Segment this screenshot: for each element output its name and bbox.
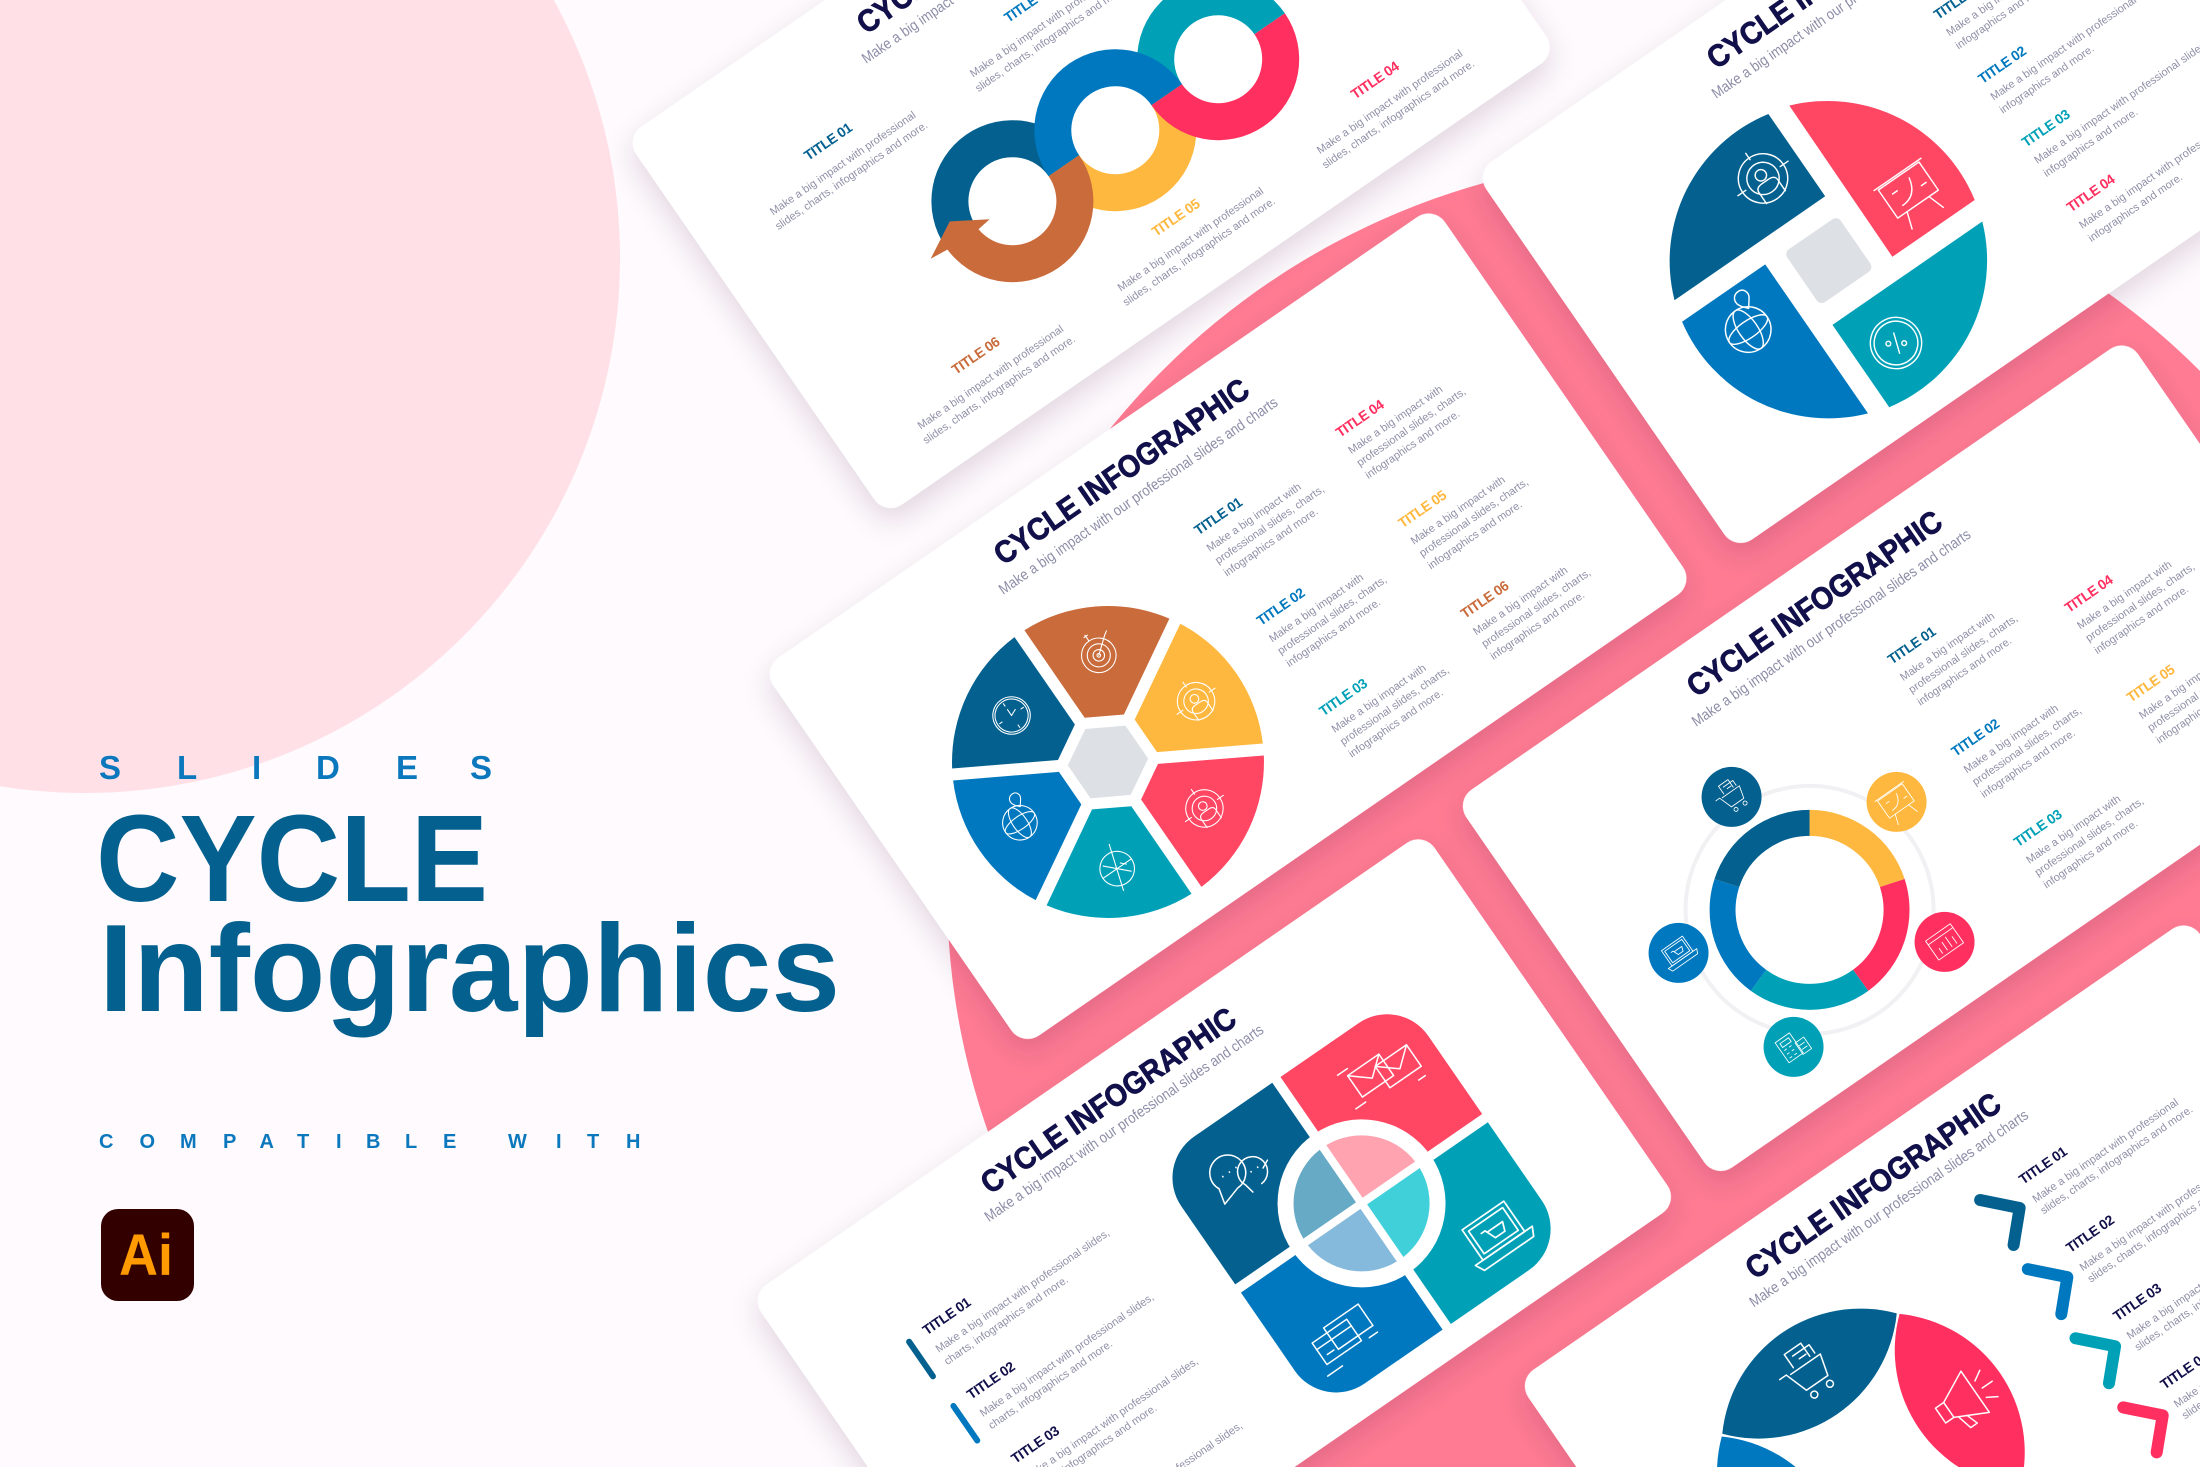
text: title 03	[2011, 763, 2155, 891]
text: title 02: Make a big impact with	[1267, 572, 1366, 645]
text: title 02: Make a big impact with	[1962, 703, 2061, 776]
panel: slide with four part pie	[1475, 0, 2200, 551]
text: title 01: professional slides, charts,	[1213, 483, 1327, 567]
slide card	[762, 206, 1694, 1047]
text: title 04	[2062, 529, 2200, 657]
slide heading: Make a big impact with our professional slides and charts	[982, 1021, 1267, 1226]
text: title 01 with bar: Make a big impact with professional slides,	[934, 1227, 1112, 1355]
panel: slide with hexagon pie	[762, 206, 1694, 1047]
slide heading: CYCLE INFOGRAPHIC	[1680, 503, 1949, 704]
label: COMPATIBLE WITH: COMPATIBLE WITH	[99, 1131, 640, 1153]
rounded square quadrant chart	[1153, 995, 1570, 1412]
text: title 01	[748, 83, 930, 233]
text: title 01	[1191, 451, 1335, 579]
text: title 06: TITLE 06	[949, 333, 1003, 377]
icon: Adobe Illustrator badge	[101, 1209, 194, 1301]
text: title 03: Make a big impact with	[1330, 662, 1429, 736]
text: title 03: TITLE 03	[2011, 806, 2065, 850]
panel: slide with rounded square cycle	[750, 832, 1679, 1467]
four part pie chart	[1608, 40, 2049, 481]
chevrons with titles	[1980, 1071, 2200, 1454]
label: SLIDES: SLIDES	[99, 749, 492, 786]
slide heading: Make a big impact with our professional slides and charts	[1746, 1107, 2032, 1311]
text: title 04: infographics and more.	[1363, 408, 1462, 482]
text: title 04: professional slides, charts,	[2084, 561, 2197, 644]
text: title 01: infographics and more.	[1222, 506, 1321, 579]
chevrons with titles: TITLE 02	[2063, 1211, 2117, 1256]
slide card	[1517, 918, 2200, 1467]
chevrons with titles: Make a big impact with professional	[2031, 1097, 2181, 1205]
slide heading: Make a big impact with our professional slides and charts	[996, 394, 1281, 598]
slide card	[1475, 0, 2200, 551]
text: title 05: TITLE 05	[1149, 195, 1203, 239]
slide card	[750, 832, 1679, 1467]
heading: CYCLE Infographics: Infographics	[99, 900, 840, 1038]
text: title 06: Make a big impact with	[1471, 565, 1570, 638]
text: title 06: infographics and more.	[1488, 589, 1587, 663]
text: title 02	[1254, 542, 1398, 670]
text: title 04: Make a big impact with	[2075, 559, 2174, 632]
text: title 06: TITLE 06	[1458, 577, 1512, 621]
text: title 03: professional slides, charts,	[1338, 664, 1452, 748]
text: title 02	[1948, 673, 2092, 801]
text: title 03: TITLE 03	[2019, 106, 2073, 150]
text: title 02: infographics and more.	[1284, 596, 1383, 670]
decorative pale pink circle	[0, 0, 620, 793]
text: title 04: TITLE 04	[1348, 58, 1402, 102]
text: title 05: TITLE 05	[2123, 661, 2178, 705]
text: title 02: infographics and more.	[1979, 727, 2078, 801]
text: title 04	[1333, 354, 1477, 482]
slide card	[1455, 338, 2200, 1179]
text: title 04: professional slides, charts,	[1355, 386, 1468, 469]
chevrons with titles: TITLE 03	[2110, 1280, 2164, 1324]
text: title 03: infographics and more.	[2041, 106, 2140, 180]
text: title 02: professional slides, charts,	[1970, 705, 2084, 788]
text: title 01 with bar: TITLE 01	[919, 1294, 974, 1338]
leaf petal cycle chart	[1652, 1244, 2089, 1467]
text: title 02: TITLE 02	[1948, 715, 2003, 759]
text: title 02 with bar: TITLE 02	[964, 1358, 1018, 1402]
text: title 05: Make a big impact with professional	[1116, 185, 1266, 294]
text: title 02: professional slides, charts,	[1276, 574, 1389, 657]
text: title 03: infographics and more.	[1347, 687, 1446, 760]
text: title 03	[1316, 632, 1460, 760]
text: title 02: TITLE 02	[1975, 42, 2029, 87]
text: title 06	[1458, 535, 1602, 663]
text: title 04: slides, charts, infographics and more.	[1320, 58, 1477, 171]
text: title 01: infographics and more.	[1915, 635, 2014, 708]
text: title 03: Make a big impact with	[2024, 793, 2123, 866]
text: title 02 with bar	[946, 1271, 1165, 1445]
text: title 04	[1295, 22, 1477, 171]
text: title 05	[1395, 444, 1539, 572]
text: title 04: TITLE 04	[2062, 571, 2116, 616]
text: title 01: TITLE 01	[1885, 623, 1939, 667]
text: title 01: Make a big impact with	[1205, 481, 1304, 555]
six segment pie chart	[882, 532, 1334, 992]
text: title 05: infographics and more.	[1426, 499, 1525, 572]
chevrons with titles: slides, charts, infographics and more.	[2038, 1104, 2195, 1217]
text: title 03: TITLE 03	[1316, 675, 1370, 719]
text: title 01: slides, charts, infographics and more.	[773, 119, 930, 233]
panel: slide with linked rings	[625, 0, 1557, 516]
slide heading: CYCLE INFOGRAPHIC	[1739, 1086, 2007, 1286]
text: title 04: infographics and more.	[2092, 583, 2191, 657]
linked ring chart	[884, 0, 1331, 325]
panel: slide with donut and satellites	[1455, 338, 2200, 1231]
text: title 02 with bar: Make a big impact with professional slides,	[978, 1291, 1156, 1420]
large pink circle behind slides	[947, 156, 2200, 1467]
text: title 05: slides, charts, infographics and more.	[1121, 195, 1278, 309]
text: title 06: slides, charts, infographics and more.	[921, 333, 1078, 447]
text: title 01: TITLE 01	[1191, 494, 1245, 538]
slide heading: CYCLE INFOGRAPHIC	[987, 371, 1256, 572]
text: title 01: Make a big impact with	[1898, 610, 1997, 684]
text: title 01: TITLE 01	[801, 119, 855, 163]
text: title 03: infographics and more.	[2041, 818, 2140, 891]
text: title 06: professional slides, charts,	[1480, 567, 1593, 650]
text: title 01 with bar: charts, infographics and more.	[942, 1274, 1071, 1368]
text: title 05: TITLE 05	[1395, 486, 1449, 531]
text: title 05: Make a big impact with	[1409, 474, 1508, 547]
text: title 01: Make a big impact with professional	[768, 109, 918, 218]
text: title 02 with bar: charts, infographics and more.	[986, 1338, 1115, 1432]
text: title 03 with bar: TITLE 03	[1008, 1422, 1062, 1467]
text: title 05: professional slides, charts,	[1417, 476, 1531, 560]
slide card	[625, 0, 1557, 516]
text: title 04: TITLE 04	[1333, 396, 1387, 440]
text: title 04 with bar	[1035, 1399, 1254, 1467]
text: title 04: TITLE 04	[2064, 171, 2118, 215]
text: title 06: Make a big impact with professional	[916, 323, 1066, 432]
panel: slide with leaf cycle	[1517, 918, 2200, 1467]
text: title 06	[896, 297, 1078, 447]
text: title 01 with bar	[902, 1207, 1121, 1380]
heading: CYCLE Infographics: CYCLE	[96, 791, 488, 928]
text: title 04: Make a big impact with	[1346, 383, 1445, 457]
text: title 02: TITLE 02	[1254, 584, 1308, 629]
text: title 03 with bar	[991, 1335, 1210, 1467]
donut chart with icon satellites	[1649, 767, 1975, 1077]
text: title 04: Make a big impact with professional	[1315, 48, 1465, 157]
text: title 05	[2123, 619, 2200, 747]
heading: CYCLE Infographics	[96, 791, 840, 1038]
slide heading: CYCLE INFOGRAPHIC	[974, 1000, 1243, 1201]
slide heading: Make a big impact with our professional slides and charts	[1689, 526, 1974, 730]
icon: Adobe Illustrator badge: Ai	[119, 1223, 173, 1288]
text: title 04: infographics and more.	[2086, 171, 2185, 245]
text: title 01: professional slides, charts,	[1907, 613, 2020, 696]
text: title 03: professional slides, charts,	[2033, 795, 2146, 879]
text: title 01	[1931, 0, 2132, 52]
text: title 05	[1096, 159, 1278, 309]
text: title 01	[1885, 580, 2029, 708]
text: title 02: infographics and more.	[1998, 43, 2097, 116]
chevrons with titles: TITLE 01	[2016, 1143, 2070, 1187]
